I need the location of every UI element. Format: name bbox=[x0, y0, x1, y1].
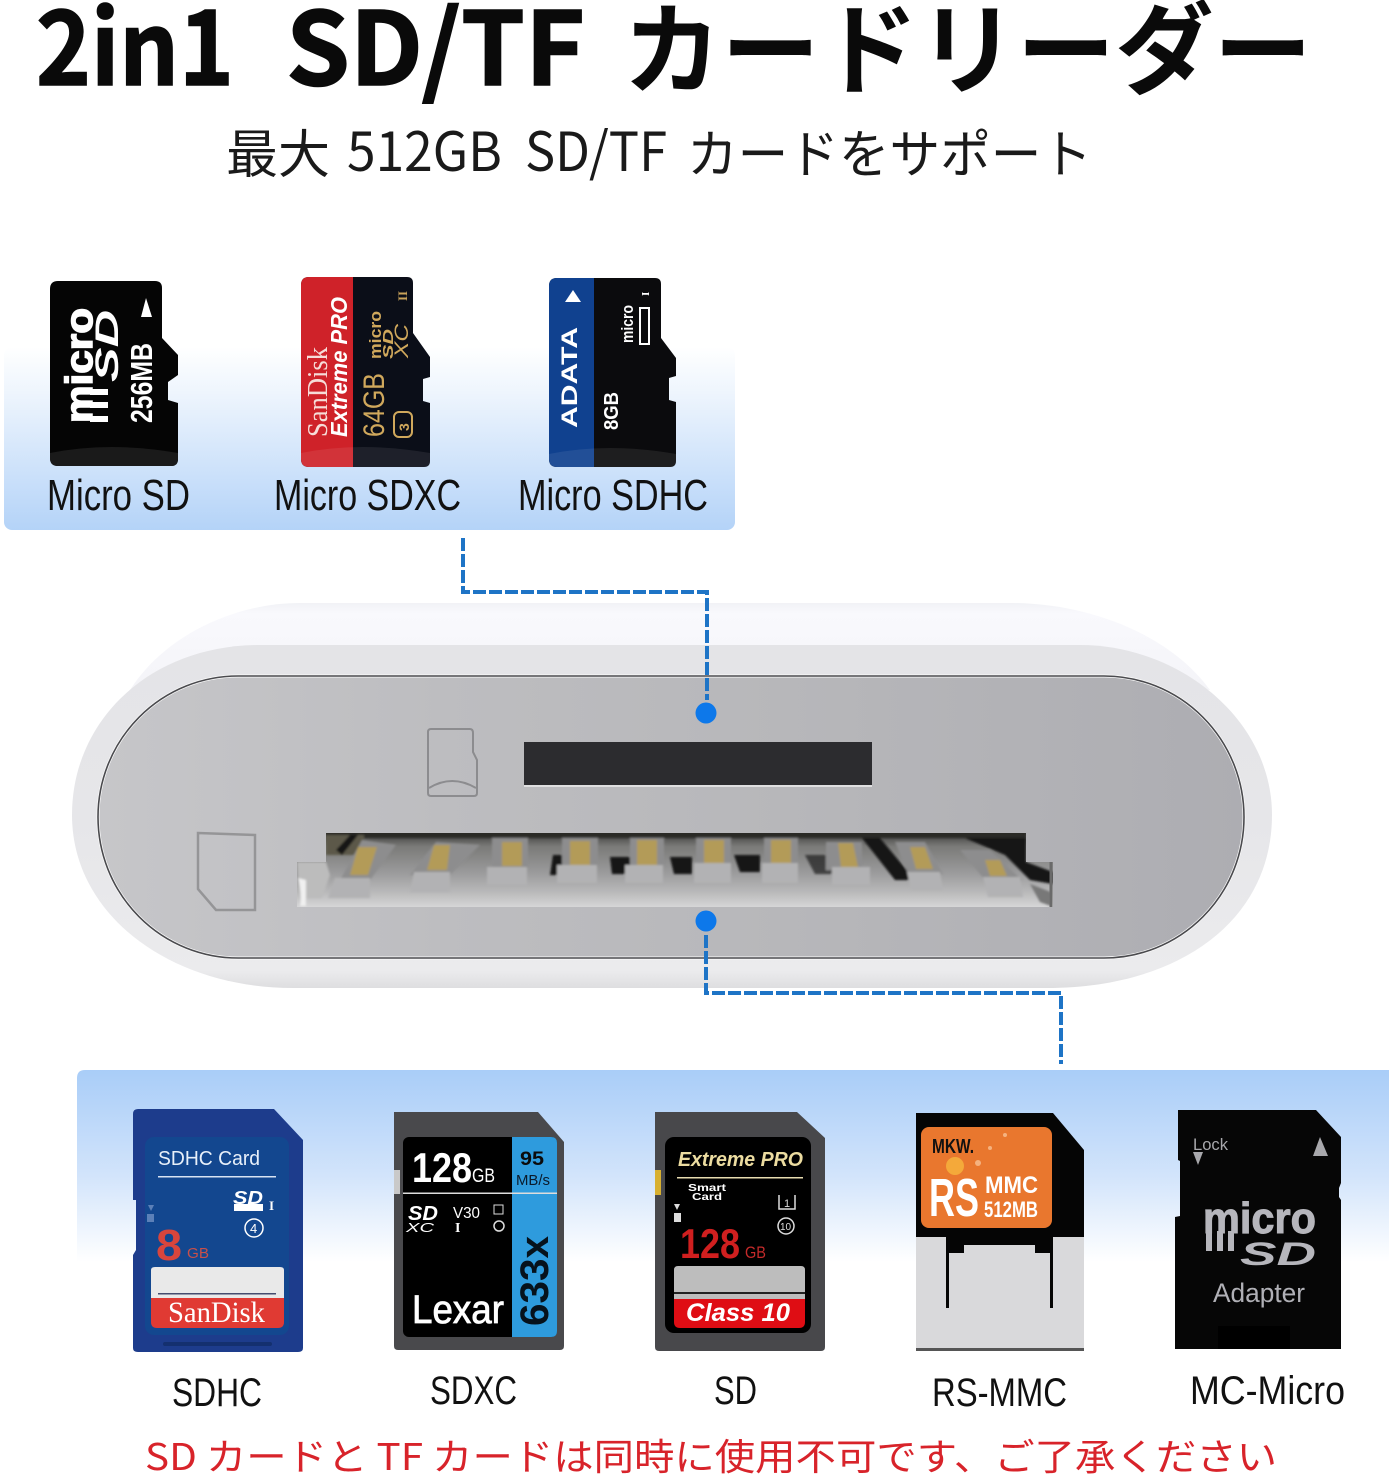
card: SanDisk Extreme PRO micro SDXC 64GB: Extreme PRO bbox=[326, 297, 352, 437]
card: SanDisk SDHC 8GB: 8 bbox=[156, 1221, 182, 1270]
card: SanDisk Extreme PRO SD 128GB bbox=[655, 1112, 825, 1351]
card: SanDisk SDHC 8GB: 4 bbox=[250, 1221, 257, 1236]
panel: full-size cards bbox=[77, 1070, 1389, 1352]
gold contacts bbox=[350, 840, 1007, 876]
label: MC-Micro: MC-Micro bbox=[1190, 1369, 1345, 1413]
card: ADATA micro SDHC 8GB: micro bbox=[618, 305, 637, 343]
card: Micro SD 256MB bbox=[50, 281, 178, 466]
card: SanDisk Extreme PRO micro SDXC 64GB: 3 bbox=[396, 423, 412, 431]
label: RS-MMC: RS-MMC bbox=[932, 1371, 1067, 1415]
label: Micro SDXC: Micro SDXC bbox=[274, 471, 461, 520]
card: ADATA micro SDHC 8GB: ADATA bbox=[557, 327, 582, 428]
card: SanDisk SDHC 8GB: I bbox=[269, 1198, 274, 1213]
marker dot: SD slot bbox=[696, 910, 716, 932]
card: RS-MMC 512MB bbox=[916, 1113, 1084, 1351]
card: Lexar SDXC 128GB: SD bbox=[408, 1203, 438, 1225]
marker dot: micro slot bbox=[696, 702, 716, 724]
card: SanDisk Extreme PRO SD 128GB: Class 10 bbox=[686, 1299, 790, 1327]
title bbox=[36, 0, 1312, 115]
subtitle bbox=[226, 108, 1092, 188]
card: ADATA micro SDHC 8GB bbox=[549, 278, 676, 467]
card: Micro SD 256MB: SD bbox=[89, 310, 125, 382]
right slot wall bbox=[1030, 884, 1051, 906]
label: Micro SD: Micro SD bbox=[47, 471, 190, 520]
card: SanDisk Extreme PRO micro SDXC 64GB: micro bbox=[366, 311, 385, 359]
card: MC-Micro adapter: Lock bbox=[1193, 1135, 1228, 1154]
label: SDHC: SDHC bbox=[172, 1371, 262, 1415]
card: SanDisk SDHC 8GB: SDHC Card bbox=[158, 1147, 260, 1170]
card: Micro SD 256MB: micro bbox=[59, 308, 101, 423]
shadows between contacts bbox=[336, 835, 1053, 884]
card: SanDisk Extreme PRO micro SDXC 64GB: SD bbox=[380, 329, 397, 359]
card: SanDisk SDHC 8GB: SD bbox=[233, 1188, 263, 1208]
card: RS-MMC 512MB: 512MB bbox=[984, 1197, 1038, 1222]
card: Lexar SDXC 128GB: V30 bbox=[453, 1205, 480, 1222]
card: SanDisk Extreme PRO micro SDXC 64GB: XC bbox=[392, 324, 413, 359]
subtitle: 最大 bbox=[226, 113, 330, 188]
subtitle: SD/TF bbox=[525, 108, 667, 187]
micro SD slot bbox=[524, 742, 872, 787]
card: Lexar SDXC 128GB: 95 bbox=[520, 1149, 544, 1170]
card: Micro SD 256MB: 256MB bbox=[124, 343, 159, 423]
contact sleeves bbox=[340, 838, 1022, 880]
card reader device bbox=[72, 603, 1272, 988]
card: SanDisk Extreme PRO SD 128GB: 1 bbox=[784, 1198, 790, 1210]
card: Lexar SDXC 128GB: 633x bbox=[513, 1236, 557, 1326]
SD card slot with contacts bbox=[297, 831, 1053, 907]
card: Lexar SDXC 128GB: Lexar bbox=[412, 1288, 504, 1332]
card: SanDisk Extreme PRO SD 128GB: Smart bbox=[688, 1182, 727, 1194]
card: ADATA micro SDHC 8GB: 8GB bbox=[601, 392, 623, 430]
device face bbox=[98, 676, 1244, 958]
label: Micro SDHC: Micro SDHC bbox=[518, 471, 708, 520]
card: MC-Micro adapter bbox=[1175, 1110, 1341, 1349]
label: SD: SD bbox=[714, 1369, 757, 1413]
card: SanDisk Extreme PRO SD 128GB: GB bbox=[745, 1243, 766, 1262]
card: Lexar SDXC 128GB: MB/s bbox=[516, 1172, 550, 1189]
subtitle: 512GB bbox=[347, 108, 502, 187]
icon: SD card outline bbox=[198, 833, 255, 910]
card: Lexar SDXC 128GB: XC bbox=[404, 1220, 435, 1235]
card: Lexar SDXC 128GB: GB bbox=[472, 1166, 495, 1187]
card: RS-MMC 512MB: RS bbox=[929, 1168, 979, 1228]
panel: micro cards bbox=[4, 277, 735, 530]
card: MC-Micro adapter: micro bbox=[1203, 1194, 1316, 1243]
card: SanDisk Extreme PRO SD 128GB: Extreme PRO bbox=[678, 1149, 803, 1171]
card: Lexar SDXC 128GB: 128 bbox=[412, 1144, 472, 1191]
card: SanDisk Extreme PRO SD 128GB: Card bbox=[692, 1191, 722, 1203]
card: SanDisk SDHC 8GB: SanDisk bbox=[168, 1296, 265, 1329]
card: RS-MMC 512MB: MKW. bbox=[932, 1136, 974, 1158]
device front rim bbox=[72, 645, 1272, 988]
connector: top dashed line bbox=[463, 538, 707, 700]
device top surface bbox=[130, 603, 1210, 690]
connector: bottom dashed line bbox=[706, 935, 1061, 1064]
card: MC-Micro adapter: Adapter bbox=[1213, 1278, 1305, 1308]
card: ADATA micro SDHC 8GB: I bbox=[640, 292, 652, 296]
label: SDXC: SDXC bbox=[430, 1369, 517, 1413]
card: SanDisk SDHC 8GB bbox=[133, 1109, 303, 1352]
card: Lexar SDXC 128GB: I bbox=[455, 1221, 460, 1236]
card: RS-MMC 512MB: MMC bbox=[985, 1172, 1038, 1199]
card: MC-Micro adapter: SD bbox=[1240, 1236, 1316, 1272]
card: SanDisk Extreme PRO micro SDXC 64GB: SanDisk bbox=[303, 347, 334, 437]
contact blocks bbox=[328, 863, 1023, 898]
card: SanDisk Extreme PRO micro SDXC 64GB: II bbox=[395, 291, 410, 301]
card: SanDisk Extreme PRO micro SDXC 64GB: 64GB bbox=[358, 373, 391, 437]
card: SanDisk Extreme PRO SD 128GB: 10 bbox=[780, 1222, 792, 1233]
card: SanDisk SDHC 8GB: GB bbox=[187, 1245, 209, 1262]
card: Lexar SDXC 128GB bbox=[394, 1112, 564, 1350]
card: SanDisk Extreme PRO SD 128GB: 128 bbox=[680, 1220, 740, 1267]
card: SanDisk Extreme PRO micro SDXC 64GB bbox=[301, 277, 430, 467]
icon: micro SD outline bbox=[428, 729, 477, 796]
subtitle: カードをサポート bbox=[687, 113, 1092, 188]
